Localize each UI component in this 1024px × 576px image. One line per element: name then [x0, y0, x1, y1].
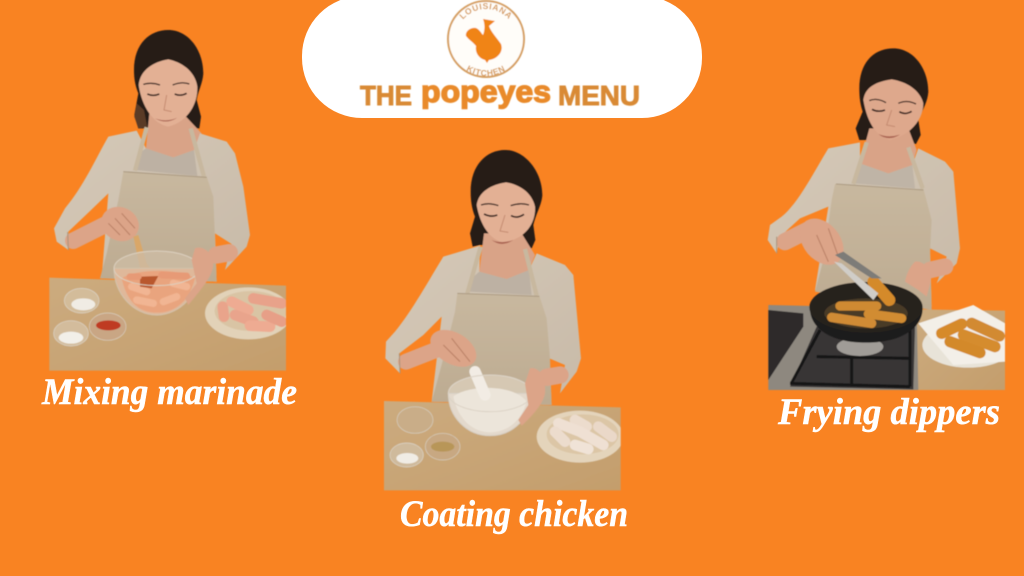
logo wordmark: MENU — [558, 80, 640, 111]
step 3: frying dippers — [768, 48, 1014, 433]
caption: mixing marinade: Mixing marinade — [41, 372, 297, 413]
logo badge — [446, 0, 526, 79]
caption: coating chicken: Coating chicken — [400, 494, 628, 535]
logo badge: LOUISIANA — [458, 2, 512, 20]
logo badge: KITCHEN — [466, 65, 506, 77]
logo wordmark — [360, 74, 640, 111]
photo: cook mixing marinade — [49, 30, 292, 371]
photo: cook coating chicken — [384, 150, 623, 490]
step 1: mixing marinade — [41, 30, 297, 413]
logo wordmark: THE — [360, 80, 412, 111]
photo: cook frying dippers — [768, 48, 1014, 390]
caption: frying dippers: Frying dippers — [777, 392, 1000, 433]
step 2: coating chicken — [384, 150, 628, 535]
logo wordmark: popeyes — [421, 74, 551, 109]
logo panel — [302, 0, 702, 118]
